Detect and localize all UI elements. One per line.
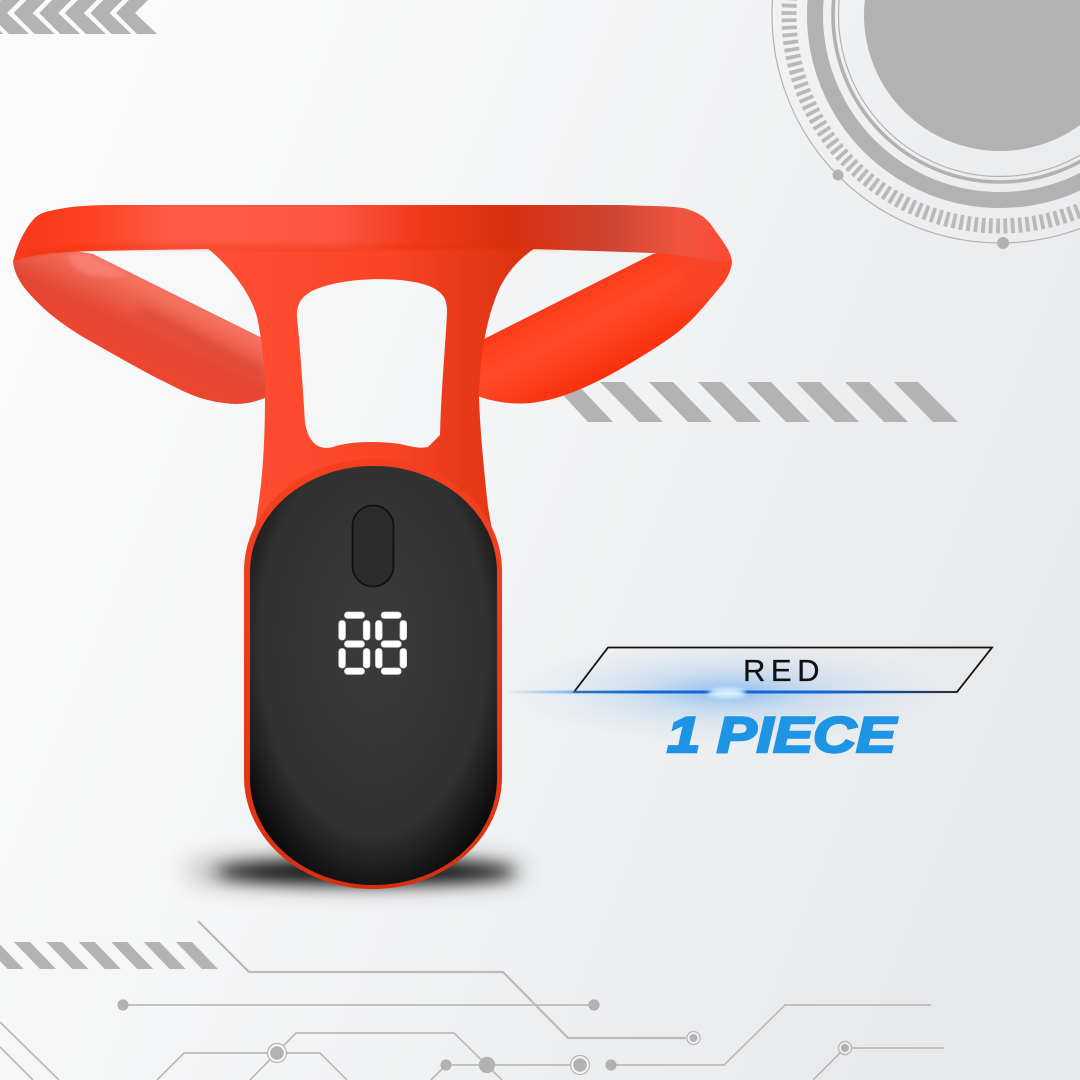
- circuit ring node core: [573, 1058, 587, 1072]
- dial: solid disc: [864, 0, 1080, 151]
- circuit ring node core: [841, 1044, 849, 1052]
- circuit ring node core: [270, 1046, 284, 1060]
- device face: [250, 466, 497, 885]
- top band: [13, 205, 732, 262]
- quantity label: 1 PIECE: [667, 707, 898, 763]
- glow halo: [502, 640, 952, 744]
- neck yoke with window: [207, 248, 535, 585]
- dial: node bottom: [997, 237, 1009, 249]
- light beam: [505, 690, 960, 694]
- dial: outer ring: [772, 0, 1080, 243]
- dial: node left: [832, 170, 844, 180]
- left shoulder arm: [13, 252, 266, 404]
- blue light glow: [502, 640, 992, 744]
- product: red posture device: [0, 205, 740, 889]
- dial: tick ring: [789, 0, 1080, 226]
- circuit ring node: [838, 1042, 852, 1054]
- band lower crease: [30, 247, 560, 254]
- circuit node: [440, 1059, 452, 1071]
- circuit node: [588, 999, 600, 1011]
- decorative chevrons top left: [0, 0, 157, 34]
- circuit node: [479, 1057, 495, 1073]
- circuit node: [117, 999, 129, 1011]
- circuit ring node: [268, 1044, 286, 1062]
- dial: thin inner ring: [838, 0, 1080, 176]
- digit two: [376, 612, 407, 674]
- circuit ring node: [570, 1056, 590, 1074]
- color label: RED: [743, 653, 825, 688]
- circuit ring node core: [690, 1034, 698, 1042]
- label frame: [574, 648, 992, 692]
- circuit node: [605, 1059, 617, 1071]
- light flare: [708, 688, 746, 698]
- digit one: [339, 612, 370, 674]
- diagonal stripes bottom left: [0, 942, 218, 969]
- right shoulder arm: [479, 253, 732, 404]
- product ground shadow: [186, 857, 526, 885]
- circuit lines bottom: [0, 921, 944, 1080]
- button: [352, 506, 394, 586]
- device body rim: [244, 459, 502, 889]
- LED digits 88: [339, 612, 407, 674]
- concentric dial top right: [772, 0, 1080, 249]
- circuit ring node: [687, 1032, 700, 1044]
- diagonal stripes behind product: [551, 382, 958, 422]
- dial: medium ring: [833, 0, 1080, 182]
- dial: thick ring: [815, 0, 1080, 200]
